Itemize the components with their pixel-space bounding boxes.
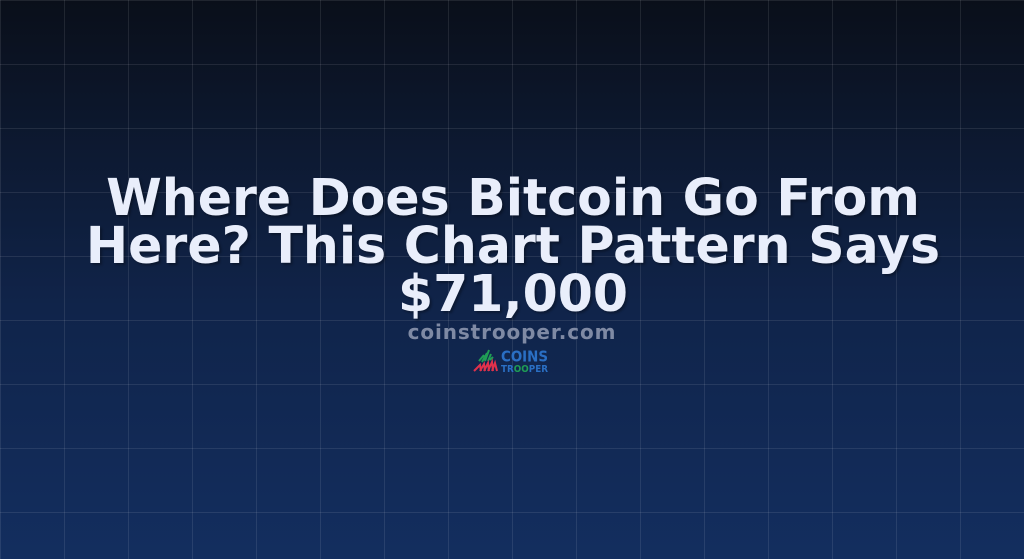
title: Here? This Chart Pattern Says xyxy=(86,216,940,275)
title xyxy=(86,168,940,323)
logo: Coins Trooper xyxy=(473,348,548,374)
wordmark xyxy=(501,348,548,375)
website text: coinstrooper.com xyxy=(408,320,616,344)
icon: green and red chart peaks xyxy=(474,350,497,371)
title: $71,000 xyxy=(398,264,628,323)
title: Where Does Bitcoin Go From xyxy=(106,168,920,227)
